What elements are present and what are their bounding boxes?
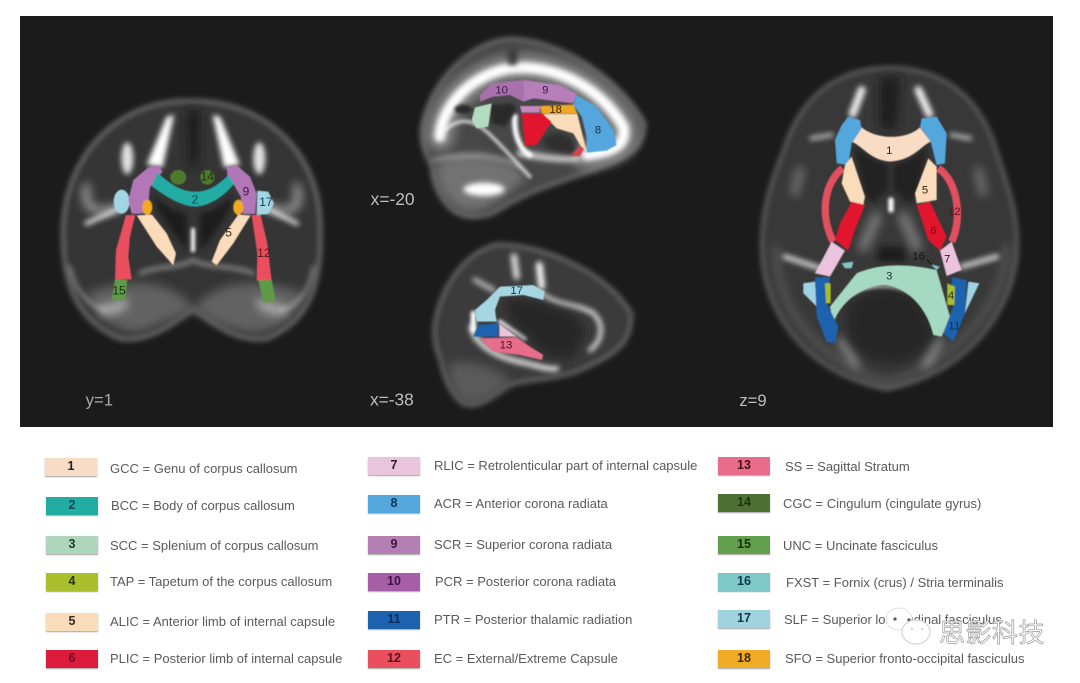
slice label: y=1 xyxy=(86,391,113,410)
tract numbers: 18 xyxy=(549,104,562,116)
legend item 17: 17 xyxy=(737,611,751,625)
legend item 15: UNC = Uncinate fasciculus xyxy=(783,538,938,553)
tract numbers: 9 xyxy=(243,185,250,199)
watermark text: 思影科技 xyxy=(939,618,1045,648)
legend item 6: PLIC = Posterior limb of internal capsule xyxy=(110,651,342,666)
legend item 9 xyxy=(368,536,612,556)
tract regions xyxy=(112,165,276,303)
legend item 15: 15 xyxy=(737,537,751,551)
watermark icon xyxy=(886,608,930,645)
tract numbers: 14 xyxy=(201,169,214,183)
tract regions xyxy=(803,117,979,343)
legend item 3: 3 xyxy=(69,537,75,551)
legend item 16: FXST = Fornix (crus) / Stria terminalis xyxy=(786,575,1004,590)
brain: coronal slice y=1 xyxy=(63,101,321,410)
legend item 7: 7 xyxy=(391,458,397,472)
legend item 14: 14 xyxy=(737,495,751,509)
tract numbers: 17 xyxy=(259,195,273,209)
slice label: x=-20 xyxy=(371,189,414,209)
tract numbers: 11 xyxy=(948,321,960,333)
tract numbers: 2 xyxy=(192,193,199,207)
legend item 11: 11 xyxy=(387,612,401,626)
legend item 1 xyxy=(44,458,298,478)
legend item 4 xyxy=(46,573,332,592)
tract numbers: 12 xyxy=(257,246,271,260)
legend item 7: RLIC = Retrolenticular part of internal capsule xyxy=(434,458,697,473)
tract numbers: 3 xyxy=(886,271,892,283)
legend xyxy=(44,457,1025,670)
panel: brain scans xyxy=(20,16,1053,427)
legend item 13: 13 xyxy=(737,458,751,472)
legend item 12 xyxy=(368,650,618,670)
brain: sagittal slice x=-38 xyxy=(370,244,632,410)
tract numbers: 15 xyxy=(112,283,126,297)
legend item 7 xyxy=(368,457,697,476)
legend item 14 xyxy=(718,494,981,514)
tract numbers: 16 xyxy=(912,251,925,263)
tract numbers: 1 xyxy=(886,145,892,157)
slice label: x=-38 xyxy=(370,390,414,410)
tract numbers xyxy=(495,84,601,137)
tract numbers: 8 xyxy=(595,125,601,137)
tract numbers: 4 xyxy=(948,290,954,302)
legend item 8: ACR = Anterior corona radiata xyxy=(434,496,608,511)
legend item 15 xyxy=(718,536,938,556)
legend item 14: CGC = Cingulum (cingulate gyrus) xyxy=(783,496,981,511)
legend item 2: 2 xyxy=(69,498,75,512)
legend item 4: TAP = Tapetum of the corpus callosum xyxy=(110,574,332,589)
legend item 10 xyxy=(368,573,616,592)
legend item 8 xyxy=(368,495,608,514)
legend item 2 xyxy=(46,497,295,516)
tract regions xyxy=(472,80,617,156)
legend item 5: 5 xyxy=(69,614,75,628)
legend item 3 xyxy=(46,536,318,556)
legend item 11: PTR = Posterior thalamic radiation xyxy=(434,612,632,627)
legend item 6: 6 xyxy=(69,651,75,665)
slice label: z=9 xyxy=(739,391,767,410)
tract numbers xyxy=(500,285,523,352)
legend item 1: 1 xyxy=(68,459,74,473)
tract numbers: 17 xyxy=(510,285,523,297)
legend item 17: SLF = Superior longitudinal fasciculus xyxy=(784,612,1002,627)
brain: sagittal slice x=-20 xyxy=(371,38,645,217)
legend item 9: SCR = Superior corona radiata xyxy=(434,537,612,552)
legend item 13: SS = Sagittal Stratum xyxy=(785,459,910,474)
tract numbers: 10 xyxy=(495,85,508,97)
tract numbers: 12 xyxy=(948,206,961,218)
legend item 11 xyxy=(368,611,632,630)
legend item 9: 9 xyxy=(391,537,397,551)
legend item 18 xyxy=(718,650,1025,670)
legend item 10: 10 xyxy=(387,574,401,588)
brain: axial slice z=9 xyxy=(739,67,1018,410)
legend item 5 xyxy=(46,613,335,632)
legend item 5: ALIC = Anterior limb of internal capsule xyxy=(110,614,335,629)
legend item 4: 4 xyxy=(69,574,75,588)
legend item 10: PCR = Posterior corona radiata xyxy=(435,574,616,589)
tract numbers: 5 xyxy=(225,226,232,240)
legend item 1: GCC = Genu of corpus callosum xyxy=(110,461,298,476)
tract numbers xyxy=(112,169,273,297)
legend item 16 xyxy=(718,573,1004,592)
tract numbers: 9 xyxy=(542,84,548,96)
legend item 8: 8 xyxy=(391,496,397,510)
tract regions xyxy=(473,285,545,360)
tract numbers: 7 xyxy=(944,253,950,265)
legend item 16: 16 xyxy=(737,574,751,588)
legend item 17 xyxy=(718,610,1002,630)
legend item 6 xyxy=(46,650,342,670)
legend item 12: 12 xyxy=(387,651,401,665)
legend item 2: BCC = Body of corpus callosum xyxy=(111,498,295,513)
tract numbers: 5 xyxy=(922,184,928,196)
legend item 18: SFO = Superior fronto-occipital fasciculus xyxy=(785,651,1025,666)
tract numbers xyxy=(886,145,961,333)
tract numbers: 13 xyxy=(500,340,512,352)
legend item 3: SCC = Splenium of corpus callosum xyxy=(110,538,318,553)
legend item 18: 18 xyxy=(737,651,751,665)
legend item 12: EC = External/Extreme Capsule xyxy=(434,651,618,666)
legend item 13 xyxy=(718,457,910,476)
tract numbers: 6 xyxy=(930,225,936,237)
